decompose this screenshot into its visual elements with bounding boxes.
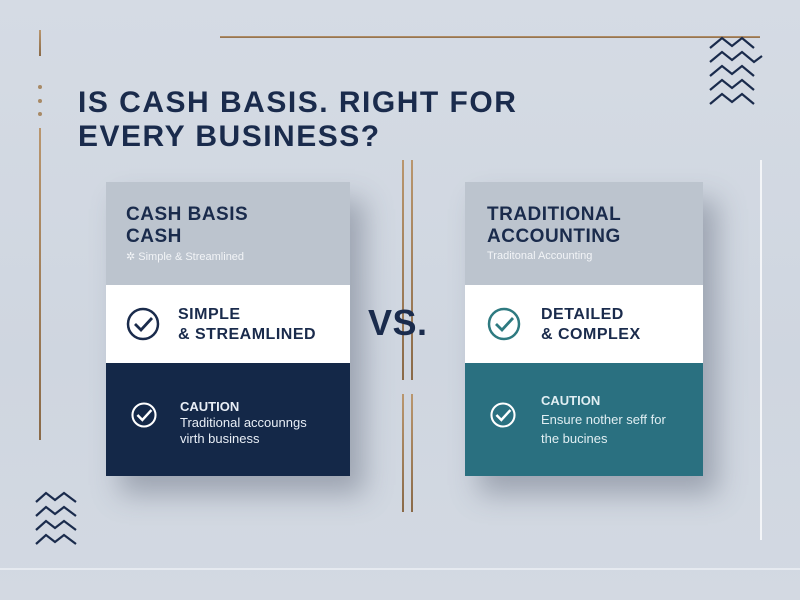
row: detailed: DETAILED: [541, 306, 624, 323]
header: cash basis: [106, 182, 350, 285]
header: cash basis: CASH: [126, 226, 182, 247]
row: detailed: & COMPLEX: [541, 326, 641, 343]
panel: cash basis: [106, 182, 350, 476]
row: caution: [465, 363, 703, 476]
row: simple: SIMPLE: [178, 306, 241, 323]
row: caution: CAUTION: [180, 399, 239, 414]
row: simple: & STREAMLINED: [178, 326, 316, 343]
row: caution: Traditional accounngs: [180, 415, 307, 430]
row: caution: [106, 363, 350, 476]
title: [78, 86, 517, 153]
decorative gold lines: [39, 30, 41, 56]
icon: zigzag pattern top right: [709, 36, 763, 105]
header: cash basis: CASH BASIS: [126, 204, 248, 225]
title: EVERY BUSINESS?: [78, 120, 381, 153]
row: caution: Ensure nother seff for: [541, 412, 666, 427]
header: traditional: Traditonal Accounting: [487, 250, 592, 262]
header: traditional: ACCOUNTING: [487, 226, 621, 247]
title: IS CASH BASIS. RIGHT FOR: [78, 86, 517, 119]
header: traditional: TRADITIONAL: [487, 204, 621, 225]
row: caution: virth business: [180, 431, 259, 446]
row: simple: [106, 285, 350, 363]
header: traditional: [465, 182, 703, 285]
row: caution: the bucines: [541, 431, 608, 446]
vs label: VS.: [368, 302, 428, 343]
header: cash basis: ✲ Simple & Streamlined: [126, 251, 244, 263]
row: caution: CAUTION: [541, 393, 600, 408]
row: detailed: [465, 285, 703, 363]
icon: zigzag pattern bottom left: [35, 492, 77, 545]
panel: traditional accounting: [465, 182, 703, 476]
